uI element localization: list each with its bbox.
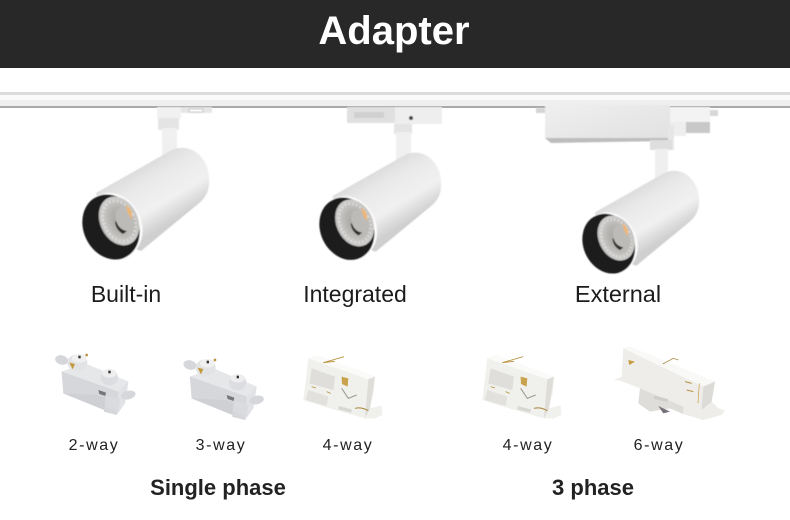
label: 2-way: 2-way <box>69 437 119 454</box>
spotlight: integrated adapter <box>309 107 442 269</box>
label: built-in: Built-in <box>91 281 161 307</box>
label: single phase 4-way: 4-way <box>323 437 373 454</box>
adapter: single phase 3-way <box>182 359 265 420</box>
heading: 3 phase: 3 phase <box>552 475 634 500</box>
title banner <box>0 0 790 68</box>
title: Adapter <box>318 9 470 53</box>
label: 3 phase 4-way: 4-way <box>503 437 553 454</box>
label: external: External <box>575 281 661 307</box>
adapter: single phase 4-way <box>303 355 382 418</box>
label: integrated: Integrated <box>303 281 407 307</box>
label: 3-way: 3-way <box>196 437 246 454</box>
adapter: 3 phase 6-way <box>614 347 725 420</box>
ceiling track <box>0 92 790 108</box>
spotlight: external adapter <box>536 105 718 282</box>
label: 6-way: 6-way <box>634 437 684 454</box>
heading: single phase: Single phase <box>150 475 286 500</box>
adapter: 3 phase 4-way <box>482 355 561 418</box>
adapter: single phase 2-way <box>54 354 136 415</box>
spotlight: built-in adapter <box>72 107 212 269</box>
